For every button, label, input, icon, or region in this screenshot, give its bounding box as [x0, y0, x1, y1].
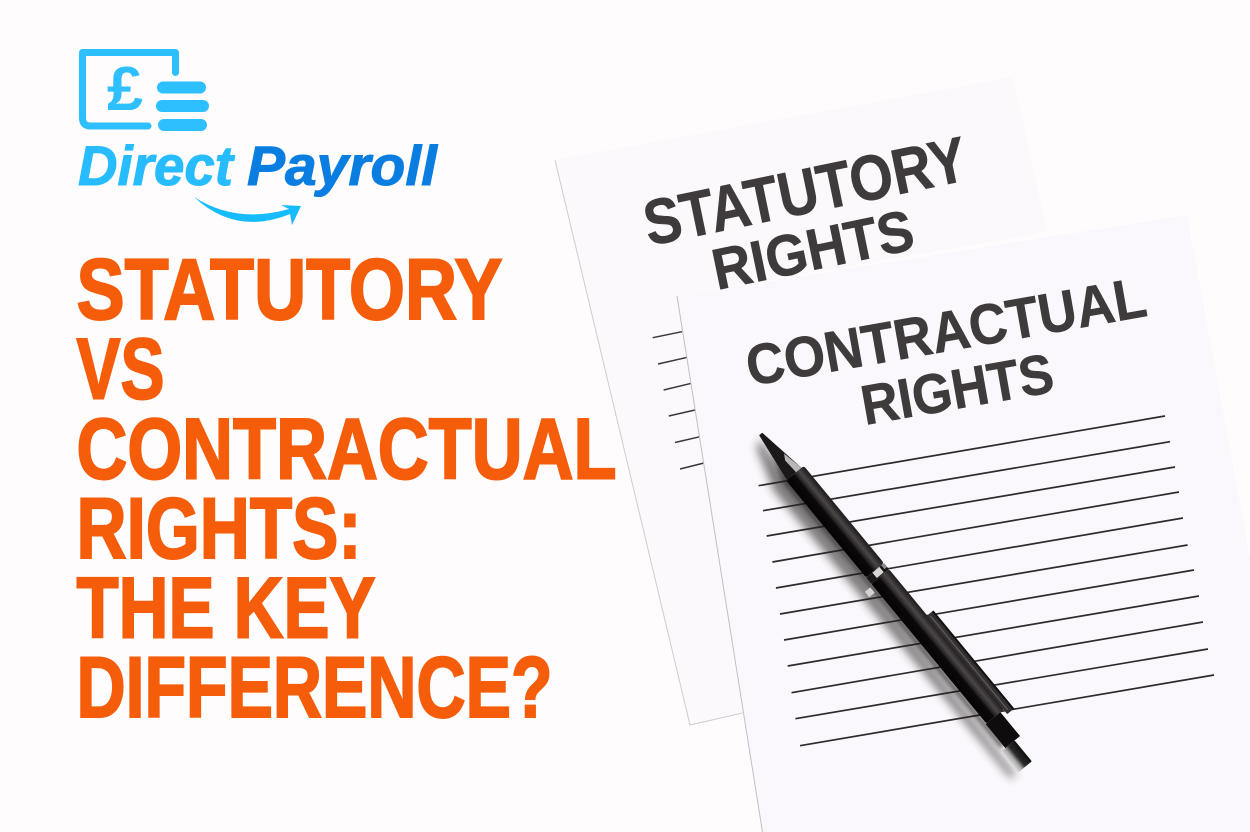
statutory heading: STATUTORY [637, 123, 973, 260]
statutory ruled lines [653, 332, 704, 469]
logo wordmark: Payroll [247, 134, 438, 197]
title: VS [76, 322, 164, 418]
pen metal band [858, 563, 895, 597]
paper: statutory rights [555, 77, 1047, 725]
logo: Direct Payroll [78, 52, 438, 225]
pen upper barrel [786, 466, 884, 578]
pen tip [754, 428, 801, 480]
title [76, 242, 616, 736]
title: CONTRACTUAL [76, 402, 616, 498]
statutory heading [637, 123, 973, 303]
title: DIFFERENCE? [76, 640, 552, 736]
title: RIGHTS: [76, 481, 362, 577]
pen clip [926, 610, 1014, 714]
logo wordmark [78, 134, 438, 197]
paper: contractual rights [677, 215, 1250, 832]
pen end button [1001, 740, 1032, 773]
contractual heading: CONTRACTUAL [741, 265, 1151, 399]
pen lower barrel [871, 569, 1004, 724]
pen neck [986, 712, 1020, 748]
statutory heading: RIGHTS [706, 198, 919, 303]
contractual ruled lines [759, 416, 1214, 746]
contractual heading: RIGHTS [856, 341, 1058, 437]
logo wordmark: Direct [78, 134, 235, 197]
icon: payslip frame with pound sign and coins [82, 52, 209, 131]
pen shadow [743, 439, 1029, 778]
icon: logo swoosh arrow [194, 197, 301, 225]
icon: pen [741, 421, 1047, 778]
icon: payslip frame with pound sign and coins: £ [107, 55, 143, 124]
title: STATUTORY [76, 242, 502, 338]
title: THE KEY [76, 560, 376, 656]
